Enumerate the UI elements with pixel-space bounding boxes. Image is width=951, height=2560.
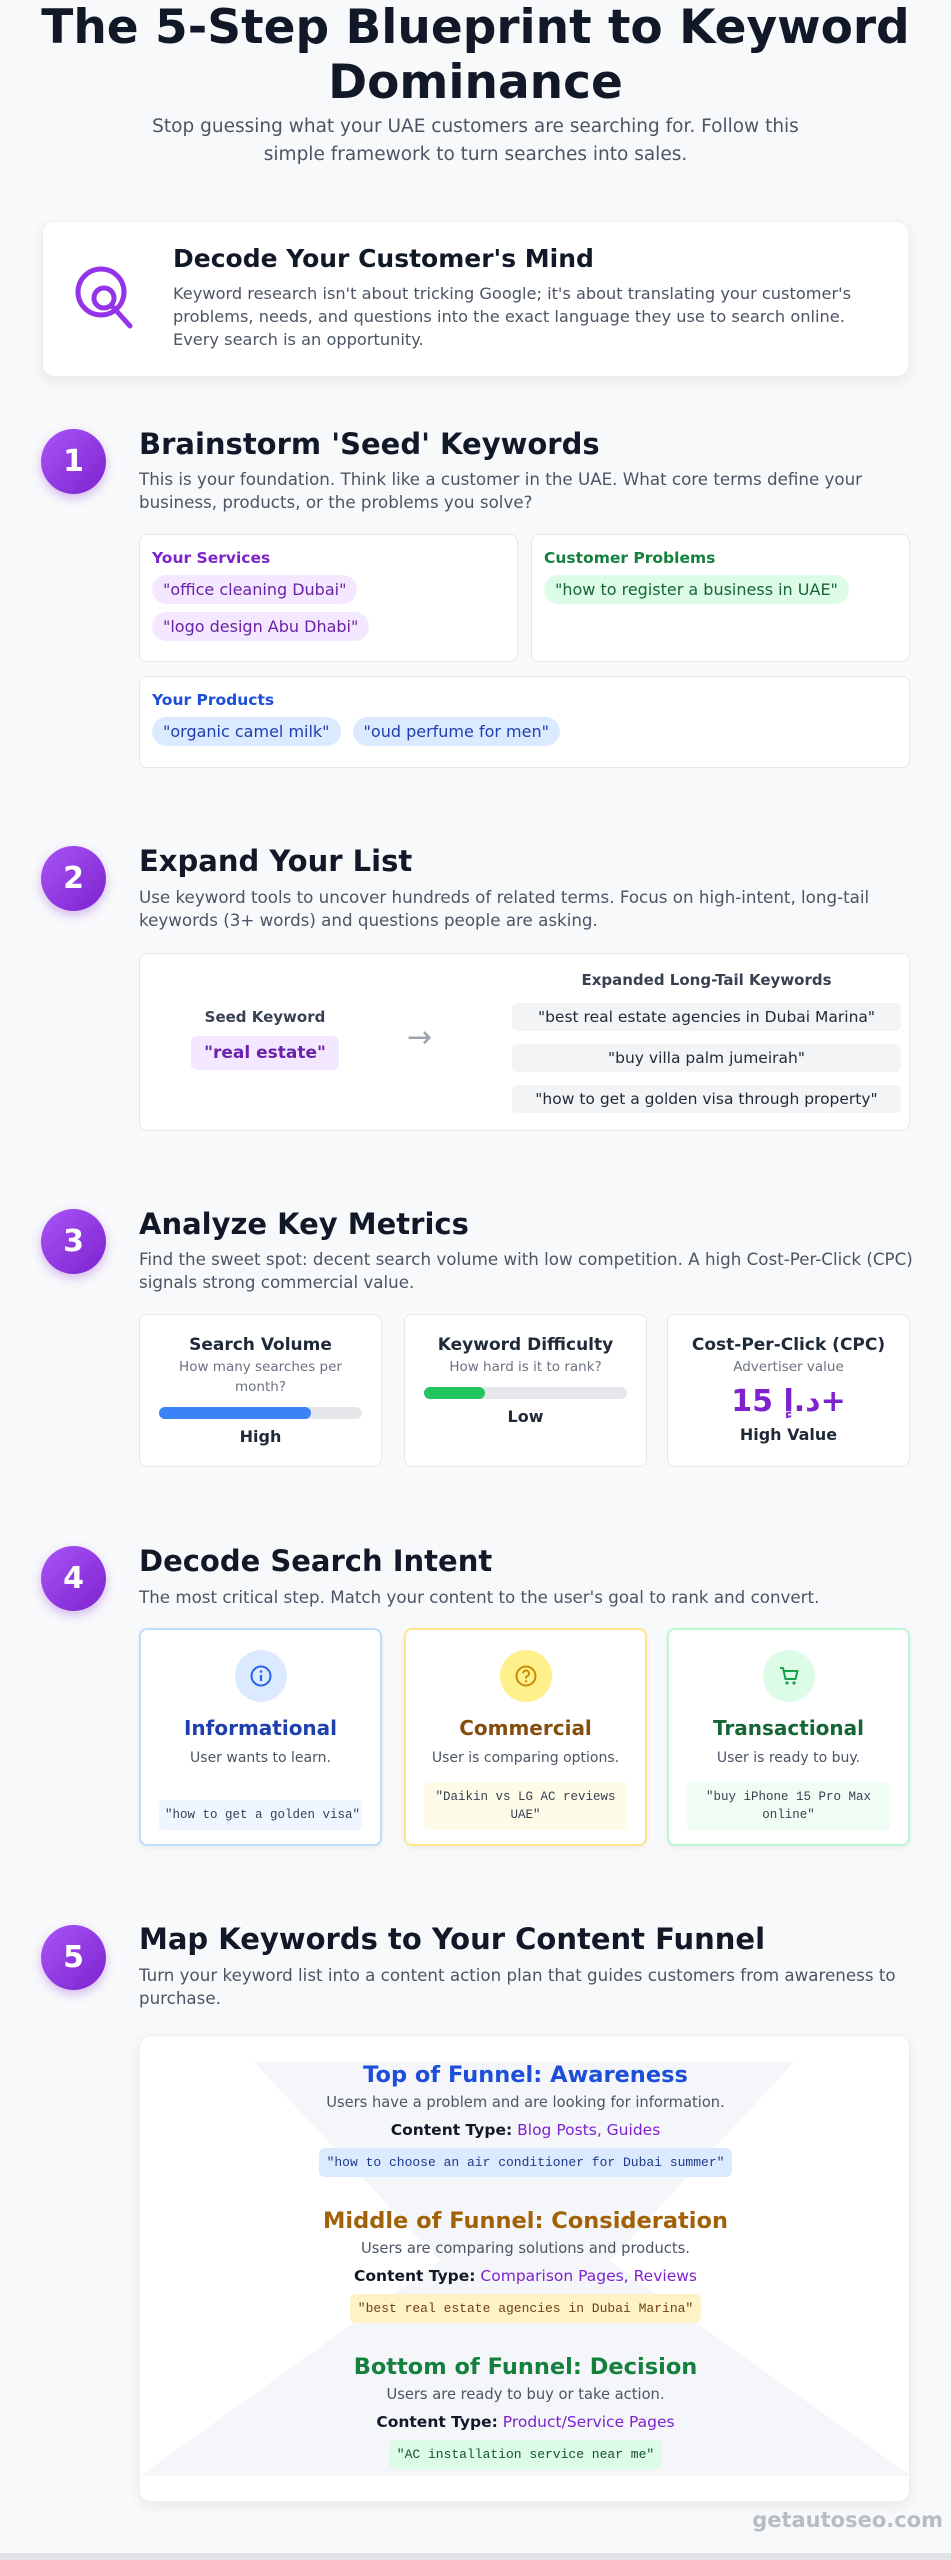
card: services: "office cleaning Dubai" <box>163 580 346 599</box>
expansion card: "how to get a golden visa through property" <box>535 1090 878 1108</box>
step 2 <box>36 844 869 930</box>
intent: transactional: "buy iPhone 15 Pro Max online" <box>706 1790 871 1822</box>
subtitle <box>152 116 799 165</box>
metric: CPC: Advertiser value <box>733 1359 844 1375</box>
card: products: "organic camel milk" <box>163 722 330 741</box>
expansion card: "buy villa palm jumeirah" <box>608 1049 805 1067</box>
step number 2: 2 <box>63 861 84 896</box>
step number 5 <box>41 1925 106 1990</box>
card: problems: Customer Problems <box>544 549 715 567</box>
metric: keyword difficulty <box>404 1314 647 1467</box>
step 1 <box>36 427 910 768</box>
description: The most critical step. Match your content to the user's goal to rank and convert. <box>139 1587 819 1607</box>
step 5 <box>36 1922 896 2008</box>
intent: transactional: Transactional <box>713 1716 864 1740</box>
bottom of funnel: Content Type: Product/Service Pages <box>376 2413 675 2431</box>
step number 4 <box>41 1546 106 1611</box>
description: This is your foundation. Think like a customer in the UAE. What core terms define your business, products, or the problems you solve? <box>139 469 862 512</box>
heading: Decode Search Intent <box>139 1544 492 1578</box>
funnel card <box>139 2035 910 2502</box>
metric: CPC: Cost-Per-Click (CPC) <box>692 1335 885 1355</box>
card: products: "oud perfume for men" <box>364 722 549 741</box>
top of funnel: "how to choose an air conditioner for Dubai summer" <box>327 2155 724 2170</box>
middle of funnel <box>323 2208 728 2323</box>
step number 1 <box>41 429 106 494</box>
intent: transactional <box>667 1628 910 1846</box>
description: Turn your keyword list into a content action plan that guides customers from awareness to purchase. <box>139 1965 896 2008</box>
arrow: → <box>407 1020 432 1055</box>
bottom of funnel <box>354 2354 697 2469</box>
seed keyword <box>191 1008 339 1070</box>
intent: informational: Informational <box>184 1716 337 1740</box>
metric: CPC: 15 د.إ+ <box>731 1384 846 1419</box>
card: problems <box>531 534 910 662</box>
funnel shape <box>140 2062 909 2476</box>
heading: Map Keywords to Your Content Funnel <box>139 1922 765 1956</box>
metric: search volume <box>139 1314 382 1467</box>
bottom of funnel: "AC installation service near me" <box>397 2447 654 2462</box>
description: Use keyword tools to uncover hundreds of related terms. Focus on high-intent, long-tail keywords (3+ words) and questions people are asking. <box>139 887 869 930</box>
intent: informational <box>139 1628 382 1846</box>
metric: CPC: High Value <box>740 1425 837 1444</box>
seed keyword: "real estate" <box>204 1043 326 1063</box>
card: services: Your Services <box>152 549 270 567</box>
intent: commercial: User is comparing options. <box>432 1750 619 1766</box>
top of funnel: Content Type: Blog Posts, Guides <box>391 2121 660 2139</box>
heading: Brainstorm 'Seed' Keywords <box>139 427 600 461</box>
card: services: "logo design Abu Dhabi" <box>163 617 358 636</box>
intent: commercial <box>404 1628 647 1846</box>
long-tail list <box>512 1003 901 1031</box>
step number 2 <box>41 846 106 911</box>
long-tail header: Expanded Long-Tail Keywords <box>581 971 832 989</box>
subtitle: Stop guessing what your UAE customers are searching for. Follow this <box>152 116 799 137</box>
step number 1: 1 <box>63 444 84 479</box>
card: products <box>139 676 910 768</box>
intent: informational: "how to get a golden visa" <box>165 1808 360 1822</box>
card: problems: "how to register a business in UAE" <box>555 580 838 599</box>
seed keyword: Seed Keyword <box>205 1008 325 1026</box>
title: Dominance <box>328 55 623 110</box>
step number 3: 3 <box>63 1224 84 1259</box>
intent: commercial: Commercial <box>459 1716 592 1740</box>
intent: informational: User wants to learn. <box>190 1750 331 1766</box>
title <box>41 0 910 110</box>
card: services <box>139 534 518 662</box>
step number 5: 5 <box>63 1940 84 1975</box>
step 3 <box>36 1207 913 1292</box>
subtitle: simple framework to turn searches into sales. <box>264 144 687 165</box>
bottom of funnel: Users are ready to buy or take action. <box>386 2386 665 2403</box>
title: The 5-Step Blueprint to Keyword <box>41 0 910 55</box>
intro text: Keyword research isn't about tricking Google; it's about translating your customer's problems, needs, and questions into the exact language they use to search online. Every search is an opportunity. <box>173 284 851 349</box>
metric: CPC <box>667 1314 910 1467</box>
middle of funnel: Users are comparing solutions and products. <box>361 2240 690 2257</box>
metric: search volume: Search Volume <box>189 1335 332 1355</box>
middle of funnel: Middle of Funnel: Consideration <box>323 2208 728 2234</box>
metric: keyword difficulty: How hard is it to rank? <box>449 1359 602 1375</box>
metric: keyword difficulty: Low <box>508 1407 543 1426</box>
metric: keyword difficulty: Keyword Difficulty <box>438 1335 613 1355</box>
footer brand: getautoseo.com <box>752 2508 943 2532</box>
middle of funnel: "best real estate agencies in Dubai Marina" <box>358 2301 693 2316</box>
heading: Expand Your List <box>139 844 412 878</box>
metric: search volume: month? <box>235 1379 286 1395</box>
top of funnel: Top of Funnel: Awareness <box>363 2062 688 2088</box>
intro card <box>42 221 909 377</box>
step 4 <box>36 1544 819 1620</box>
top of funnel <box>319 2062 732 2177</box>
bottom of funnel: Bottom of Funnel: Decision <box>354 2354 697 2380</box>
step number 4: 4 <box>63 1561 84 1596</box>
heading: Analyze Key Metrics <box>139 1207 469 1241</box>
top of funnel: Users have a problem and are looking for information. <box>326 2094 725 2111</box>
icon: magnifier <box>76 266 132 328</box>
card: products: Your Products <box>152 691 274 709</box>
middle of funnel: Content Type: Comparison Pages, Reviews <box>354 2267 697 2285</box>
intro heading: Decode Your Customer's Mind <box>173 244 594 273</box>
metric: search volume: How many searches per <box>179 1359 342 1375</box>
expansion card <box>139 953 910 1131</box>
metric: search volume: High <box>240 1427 281 1446</box>
step number 3 <box>41 1209 106 1274</box>
long-tail list: "best real estate agencies in Dubai Marina" <box>538 1008 875 1026</box>
intent: commercial: "Daikin vs LG AC reviews UAE" <box>435 1790 616 1822</box>
intent: transactional: User is ready to buy. <box>717 1750 860 1766</box>
description: Find the sweet spot: decent search volume with low competition. A high Cost-Per-Click (CPC) signals strong commercial value. <box>139 1249 913 1292</box>
